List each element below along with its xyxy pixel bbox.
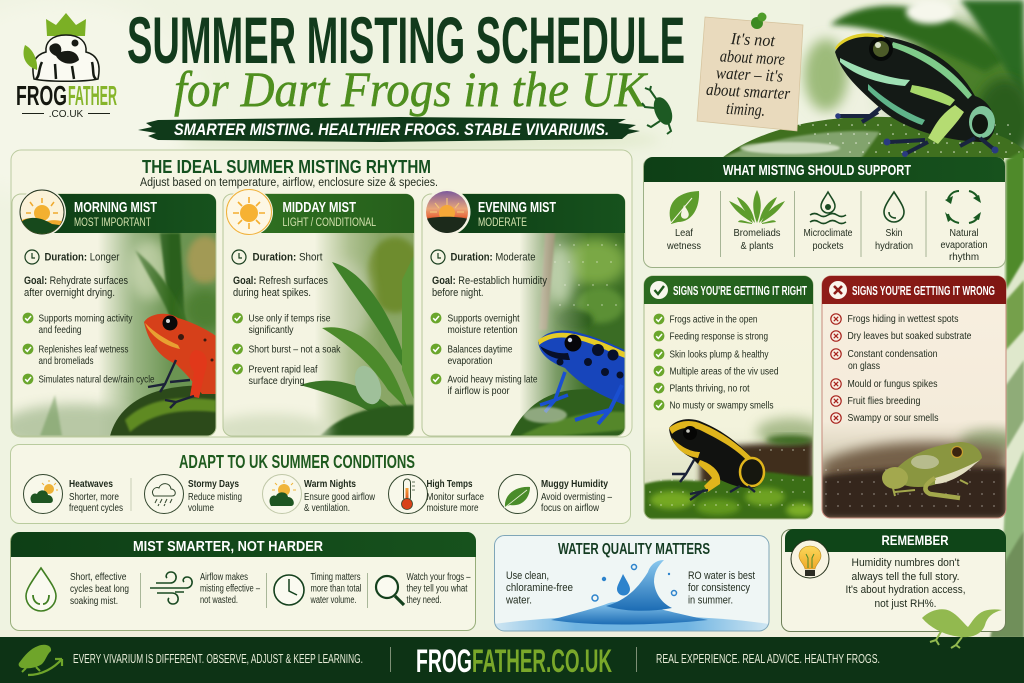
header: EVENING MIST — [478, 199, 556, 216]
text: right: REAL EXPERIENCE. REAL ADVICE. HEALTHY FROGS. — [656, 651, 880, 666]
item: short cycles: cycles beat long — [70, 584, 129, 595]
text: goal — [233, 275, 328, 299]
tagline banner — [138, 117, 640, 142]
checklist: Frogs active in the open — [670, 314, 758, 326]
checklist: Dry leaves but soaked substrate — [848, 331, 972, 342]
icon: clock — [232, 250, 246, 264]
checklist: No musty or swampy smells — [670, 400, 774, 412]
item: airflow: not wasted. — [200, 595, 238, 606]
item: natural evaporation rhythm: rhythm — [949, 252, 979, 263]
checklist: Use only if temps rise — [248, 314, 331, 324]
frog: blue — [538, 330, 625, 424]
item: airflow: misting effective – — [200, 584, 260, 594]
wordmark: FROG — [16, 80, 67, 111]
icon: clock — [431, 250, 445, 264]
item: stormy days — [144, 474, 242, 514]
item: warm nights: Ensure good airflow — [304, 492, 376, 503]
item: heatwaves — [24, 474, 123, 514]
icon: small climbing frog — [642, 86, 675, 134]
header: MOST IMPORTANT — [74, 217, 151, 229]
item: heatwaves: Shorter, more — [69, 492, 119, 503]
panel: remember — [782, 529, 1006, 632]
icon: light bulb — [791, 540, 829, 578]
text: left: EVERY VIVARIUM IS DIFFERENT. OBSERVE, ADJUST & KEEP LEARNING. — [73, 651, 363, 666]
background photo: jungle leaves, top right — [722, 0, 1024, 162]
text: duration: Duration: Longer — [44, 252, 120, 264]
heading: ADAPT TO UK SUMMER CONDITIONS — [179, 452, 415, 472]
text: goal — [432, 275, 547, 299]
item: short cycles: Short, effective — [70, 572, 127, 583]
panel: water quality matters — [494, 535, 769, 631]
item: muggy humidity: focus on airflow — [541, 503, 600, 514]
icon: clock — [25, 250, 39, 264]
header: MORNING MIST — [74, 199, 157, 216]
text — [846, 557, 966, 610]
item: bromeliads and plants — [729, 190, 785, 252]
header: LIGHT / CONDITIONAL — [282, 217, 376, 229]
icon: midday sun — [225, 188, 273, 236]
checklist: Frogs hiding in wettest spots — [848, 314, 958, 325]
frog: black and mint on leaf — [835, 33, 998, 157]
item: timing: water volume. — [310, 595, 356, 606]
header: REMEMBER — [882, 532, 948, 548]
checklist: Supports morning activity — [38, 314, 132, 324]
item: stormy days: Stormy Days — [188, 478, 239, 490]
text: goal: Goal: Rehydrate surfaces — [24, 275, 128, 287]
item: microclimate pockets — [804, 192, 853, 252]
subtitle: for Dart Frogs in the UK — [174, 61, 648, 117]
item: bromeliads and plants: Bromeliads — [734, 228, 780, 239]
item: airflow: Airflow makes — [200, 572, 248, 583]
text: goal: before night. — [432, 287, 484, 299]
item: natural evaporation rhythm: evaporation — [940, 240, 988, 251]
checklist: Plants thriving, no rot — [670, 384, 750, 394]
item: timing — [274, 572, 362, 606]
text: duration: Duration: Moderate — [450, 252, 536, 264]
item: microclimate pockets: pockets — [812, 241, 844, 252]
checklist: Simulates natural dew/rain cycle — [38, 374, 155, 386]
text: left: chloramine-free — [506, 582, 573, 594]
checklist: Replenishes leaf wetness — [38, 344, 128, 356]
header — [42, 194, 216, 233]
item: timing: Timing matters — [310, 572, 360, 583]
item: watch frogs — [376, 572, 471, 606]
checklist: Prevent rapid leaf — [248, 364, 318, 376]
checklist: Feeding response is strong — [670, 332, 768, 342]
checklist: Avoid heavy misting late — [448, 374, 538, 386]
icon: crowned frog — [24, 13, 99, 81]
item: skin hydration: hydration — [875, 241, 913, 252]
item: natural evaporation rhythm: Natural — [950, 228, 978, 239]
item: airflow — [150, 572, 260, 606]
icon: sunset — [426, 191, 470, 233]
text: always tell the full story. — [852, 571, 960, 583]
item: natural evaporation rhythm — [940, 191, 988, 263]
sticky note with pin: about smarter — [706, 80, 791, 103]
text: goal: during heat spikes. — [233, 287, 311, 299]
checklist — [654, 314, 778, 412]
header: MIST SMARTER, NOT HARDER — [133, 539, 323, 555]
text: duration: Duration: Short — [252, 252, 322, 264]
checklist: Skin looks plump & healthy — [670, 350, 768, 360]
checklist: moisture retention — [448, 325, 518, 336]
tagline banner: SMARTER MISTING. HEALTHIER FROGS. STABLE VIVARIUMS. — [174, 121, 609, 139]
text: goal: Goal: Refresh surfaces — [233, 275, 328, 287]
sticky note with pin: water – it's — [716, 63, 784, 86]
subheading: Adjust based on temperature, airflow, enclosure size & species. — [140, 177, 438, 189]
card: morning mist — [12, 190, 216, 436]
card: evening mist — [422, 188, 627, 436]
panel: signs you're getting it right — [644, 276, 824, 519]
text: right: RO water is best — [688, 570, 755, 582]
panel: what misting should support — [644, 157, 1006, 268]
item: microclimate pockets: Microclimate — [804, 228, 853, 239]
text: right: for consistency — [688, 582, 750, 594]
wordmark: FROG — [416, 643, 472, 679]
wordmark: .CO.UK — [49, 109, 84, 120]
wordmark — [416, 643, 612, 679]
footer band — [0, 637, 1024, 683]
heading: WATER QUALITY MATTERS — [558, 541, 710, 558]
checklist: and feeding — [38, 325, 82, 336]
sticky note with pin — [697, 12, 803, 131]
panel: mist smarter, not harder — [10, 532, 476, 630]
text: Humidity numbres don't — [852, 557, 960, 569]
wordmark — [16, 80, 117, 120]
header — [11, 532, 476, 557]
item: skin hydration — [875, 192, 913, 252]
text: goal: after overnight drying. — [24, 287, 115, 299]
checklist: Balances daytime — [448, 344, 513, 356]
sticky note with pin: It's not — [729, 29, 777, 50]
item: skin hydration: Skin — [886, 228, 902, 239]
text: not just RH%. — [874, 598, 936, 610]
header — [644, 276, 813, 304]
panel: the ideal summer misting rhythm — [0, 150, 632, 452]
checklist: Supports overnight — [448, 314, 520, 324]
checklist: significantly — [248, 325, 294, 336]
item: high temps: moisture more — [426, 503, 479, 514]
text: right: in summer. — [688, 594, 733, 606]
checklist: Mould or fungus spikes — [848, 379, 938, 390]
card: midday mist — [222, 189, 414, 436]
item: leaf wetness: Leaf — [675, 228, 693, 239]
checklist — [831, 314, 972, 424]
item: heatwaves: Heatwaves — [69, 478, 113, 490]
text: FATHER — [68, 80, 117, 111]
item: heatwaves: frequent cycles — [69, 503, 123, 514]
checklist: and bromeliads — [38, 356, 94, 367]
header: MIDDAY MIST — [282, 199, 356, 216]
checklist — [232, 313, 341, 387]
panel: adapt to UK summer conditions — [10, 444, 630, 524]
wordmark: FATHER.CO.UK — [472, 643, 612, 679]
item: watch frogs: they need. — [406, 595, 442, 606]
item: high temps: High Temps — [426, 478, 473, 490]
item: short cycles: soaking mist. — [70, 596, 118, 607]
text: left: Use clean, — [506, 570, 549, 582]
icon: green frog — [19, 645, 62, 675]
checklist: Short burst – not a soak — [248, 344, 341, 356]
checklist: Multiple areas of the viv used — [670, 366, 778, 378]
checklist: Swampy or sour smells — [848, 413, 938, 424]
item: bromeliads and plants: & plants — [740, 241, 774, 252]
item: stormy days: volume — [188, 503, 214, 514]
background: right side leaf strip — [990, 150, 1024, 638]
item: warm nights: & ventilation. — [304, 503, 350, 514]
checklist — [431, 313, 538, 397]
checklist: on glass — [848, 361, 880, 372]
item: high temps: Monitor surface — [426, 492, 484, 503]
item: muggy humidity: Avoid overmisting – — [541, 492, 612, 503]
item: stormy days: Reduce misting — [188, 492, 242, 503]
header: SIGNS YOU'RE GETTING IT RIGHT — [673, 283, 807, 298]
header: WHAT MISTING SHOULD SUPPORT — [723, 162, 911, 179]
text: right — [688, 570, 755, 606]
header — [822, 276, 1006, 304]
header — [785, 529, 1006, 552]
checklist: if airflow is poor — [448, 386, 510, 397]
item: warm nights: Warm Nights — [304, 478, 356, 490]
frog: red — [144, 314, 216, 408]
checklist: surface drying — [248, 376, 304, 387]
text: goal: Goal: Re-establich humidity — [432, 275, 547, 287]
item: muggy humidity: Muggy Humidity — [541, 478, 608, 490]
item: leaf wetness: wetness — [666, 241, 701, 252]
frog: yellow and black — [669, 419, 764, 500]
logo: FrogFather — [16, 13, 117, 120]
item: leaf wetness — [666, 191, 701, 252]
header — [448, 194, 625, 233]
text: It's about hydration access, — [846, 584, 966, 596]
illustration: water splash — [494, 560, 769, 631]
item: timing: more than total — [310, 584, 362, 594]
item: high temps — [388, 474, 484, 514]
text: left: water. — [505, 594, 532, 606]
text: goal — [24, 275, 128, 299]
header: MODERATE — [478, 217, 527, 229]
text: left — [505, 570, 573, 606]
icon: sunrise — [20, 190, 66, 234]
item: watch frogs: they tell you what — [406, 584, 468, 594]
heading: THE IDEAL SUMMER MISTING RHYTHM — [142, 157, 431, 177]
icon: gecko silhouette — [922, 609, 1002, 648]
header — [250, 194, 414, 233]
item: warm nights — [262, 474, 376, 514]
sticky note with pin: about more — [719, 46, 786, 69]
sticky note with pin: timing. — [726, 99, 766, 120]
item: muggy humidity — [498, 474, 612, 514]
checklist — [23, 313, 155, 386]
item: short cycles — [26, 568, 129, 611]
header — [644, 157, 1005, 182]
checklist: Fruit flies breeding — [848, 396, 920, 407]
frog: olive — [882, 442, 982, 498]
checklist: evaporation — [448, 356, 492, 367]
checklist: Constant condensation — [848, 349, 938, 360]
panel: signs you're getting it wrong — [822, 276, 1020, 518]
item: watch frogs: Watch your frogs – — [406, 572, 471, 583]
